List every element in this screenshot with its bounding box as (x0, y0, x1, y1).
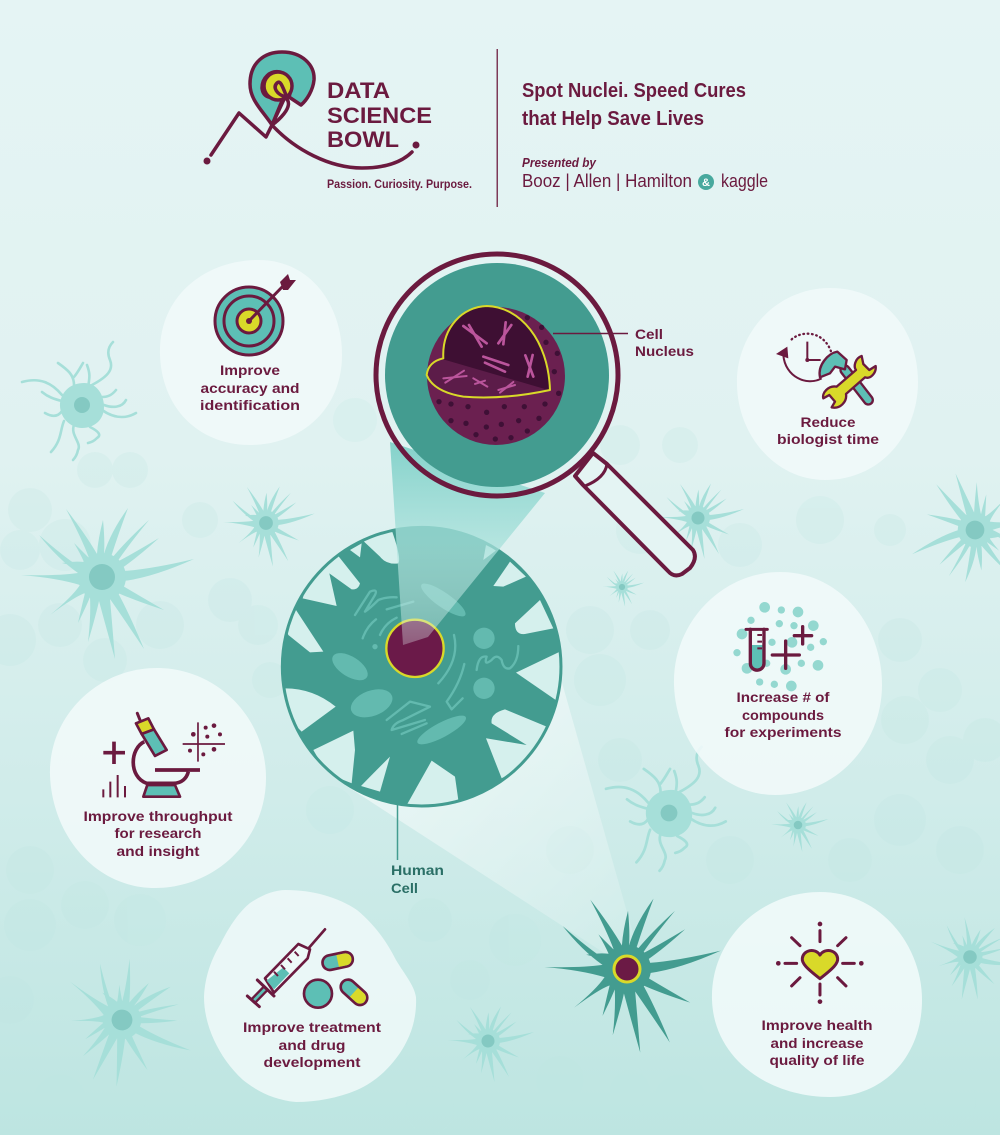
icon: microscope (103, 713, 225, 797)
presented by: kaggle (721, 171, 768, 191)
heading: that Help Save Lives (522, 108, 704, 130)
text: Reduce (800, 414, 856, 430)
text: compounds (742, 707, 824, 723)
text: and insight (116, 843, 200, 859)
label: human cell (391, 805, 444, 896)
text: accuracy and (200, 380, 300, 396)
label: human cell: Human (391, 863, 444, 878)
panel: treatment (204, 890, 416, 1102)
handle (575, 453, 695, 575)
icon: test tube and plus (733, 602, 827, 691)
lens (376, 254, 618, 496)
text (762, 1017, 872, 1068)
text: Improve treatment (243, 1019, 381, 1035)
text: and drug (278, 1037, 346, 1053)
icon: clock and tools (776, 334, 876, 408)
text: identification (200, 397, 300, 413)
logo wordmark: BOWL (327, 127, 399, 152)
text: Improve (220, 362, 280, 378)
logo: Data Science Bowl (204, 52, 472, 191)
text: quality of life (770, 1052, 865, 1068)
text: biologist time (777, 431, 879, 447)
chart: human cell (282, 527, 563, 813)
neuron cell with nucleus (544, 899, 721, 1053)
heading (522, 80, 746, 130)
text (724, 689, 842, 740)
divider (496, 49, 498, 207)
background cells (21, 342, 1000, 1116)
presented by: Presented by (522, 155, 597, 170)
text: Increase # of (736, 689, 830, 705)
panel: health (712, 892, 922, 1097)
background cell texture (0, 398, 1000, 1135)
tagline: Passion. Curiosity. Purpose. (327, 177, 472, 191)
text (200, 362, 300, 413)
text: and increase (770, 1035, 864, 1051)
label: cell nucleus (553, 327, 694, 359)
panel: compounds (674, 572, 882, 795)
panel: biologist time (737, 288, 918, 480)
text (243, 1019, 381, 1070)
text (777, 414, 879, 447)
panel: accuracy (160, 260, 342, 445)
chromosomes (443, 322, 533, 393)
text: for experiments (724, 724, 842, 740)
label: cell nucleus: Cell (635, 327, 663, 342)
nucleus cutaway (427, 306, 565, 445)
logo wordmark: SCIENCE (327, 103, 432, 128)
beam: nucleus to magnifier (390, 442, 545, 645)
text: development (264, 1054, 361, 1070)
text: for research (114, 825, 202, 841)
icon: heart (776, 922, 864, 1004)
icon: target (215, 274, 296, 355)
presented by: & (702, 177, 710, 189)
label: human cell: Cell (391, 881, 418, 896)
cell membrane gaps (283, 530, 563, 813)
text (84, 808, 233, 859)
presented by: Booz | Allen | Hamilton (522, 171, 692, 191)
label: cell nucleus: Nucleus (635, 344, 694, 359)
logo wordmark (327, 78, 432, 152)
icon: syringe and pills (247, 929, 370, 1008)
presented by (522, 155, 768, 191)
nucleus (386, 620, 444, 677)
logo wordmark: DATA (327, 78, 390, 103)
beam: human cell to neuron (345, 665, 640, 958)
text: Improve throughput (84, 808, 233, 824)
panel: throughput (50, 668, 266, 888)
icon: logo pin (204, 52, 420, 168)
text: Improve health (762, 1017, 872, 1033)
organelles (328, 579, 495, 749)
magnifying glass (376, 254, 695, 575)
heading: Spot Nuclei. Speed Cures (522, 80, 746, 102)
